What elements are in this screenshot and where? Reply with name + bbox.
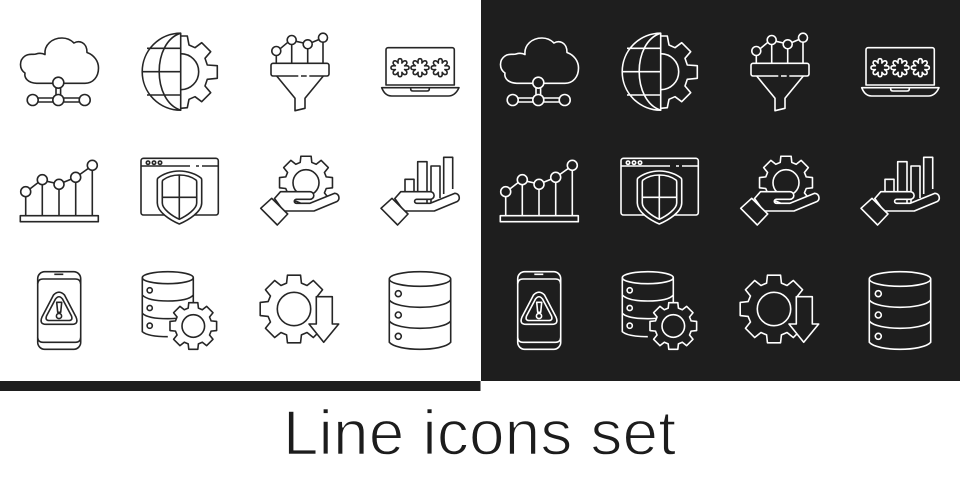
icon: browser with shield (621, 158, 698, 224)
icon: database with gear (622, 272, 697, 349)
icon: gear with down arrow (260, 275, 339, 343)
icon: browser with shield (141, 158, 218, 224)
title: Line icons set (283, 398, 676, 468)
icon: hand holding bar chart (381, 157, 459, 225)
icon: globe and gear (142, 33, 217, 110)
icon: cloud network (20, 38, 98, 106)
icon: funnel with data points (751, 33, 809, 111)
icon: database (389, 272, 451, 349)
icon: funnel with data points (271, 33, 329, 111)
icon: hand holding bar chart (861, 157, 939, 225)
icon: phone with warning (518, 272, 561, 349)
icon: line chart (500, 160, 578, 222)
icon: hand holding gear (741, 156, 819, 225)
icon: phone with warning (38, 272, 81, 349)
icon: gear with down arrow (740, 275, 819, 343)
icon: hand holding gear (261, 156, 339, 225)
panel: light icon grid (20, 33, 459, 349)
panel: dark strip under light panel (0, 381, 480, 391)
icon: database (869, 272, 931, 349)
icon: laptop with password (382, 48, 459, 96)
icon: cloud network (500, 38, 578, 106)
panel: dark background (481, 0, 960, 381)
icon: laptop with password (862, 48, 939, 96)
icon: globe and gear (622, 33, 697, 110)
panel: dark icon grid (500, 33, 939, 349)
icon: database with gear (142, 272, 217, 349)
icon: line chart (20, 160, 98, 222)
